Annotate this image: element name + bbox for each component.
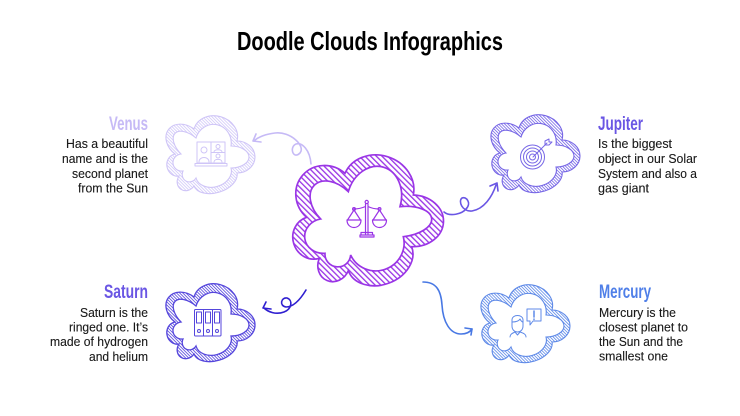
arrow: to Venus: [253, 133, 311, 164]
central cloud: [293, 155, 443, 286]
arrow: to Saturn: [263, 290, 306, 313]
text block: Saturn: [50, 282, 148, 364]
text block: Saturn: made of hydrogen: [50, 334, 148, 349]
text block: Mercury: the Sun and the: [599, 334, 683, 349]
title: Doodle Clouds Infographics: [237, 26, 503, 56]
text block: Jupiter: Is the biggest: [598, 136, 672, 151]
icon: binders: [194, 310, 221, 336]
cloud: Venus: [166, 116, 255, 194]
text block: Venus: Venus: [109, 114, 148, 135]
text block: Saturn: ringed one. It’s: [69, 320, 148, 334]
cloud: Jupiter: [491, 115, 580, 193]
text block: Saturn: and helium: [89, 349, 148, 364]
cloud: Mercury: [481, 285, 570, 363]
icon: scales: [347, 200, 386, 237]
text block: Venus: second planet: [72, 166, 148, 181]
text block: Venus: [62, 114, 148, 196]
icon: target: [520, 139, 552, 169]
text block: Mercury: Mercury: [599, 282, 651, 303]
text block: Mercury: smallest one: [599, 348, 668, 364]
text block: Mercury: Mercury is the: [599, 305, 676, 320]
icon: video call laptop: [195, 142, 227, 166]
arrow: to Mercury: [423, 282, 472, 335]
text block: Jupiter: System and also a: [598, 166, 698, 181]
text block: Venus: Has a beautiful: [66, 136, 148, 151]
arrow: to Jupiter: [444, 183, 498, 215]
text block: Venus: name and is the: [62, 151, 148, 166]
text block: Venus: from the Sun: [78, 180, 148, 196]
text block: Mercury: [599, 282, 688, 364]
icon: person with alert bubble: [510, 309, 541, 337]
text block: Jupiter: [598, 114, 698, 196]
text block: Saturn: Saturn: [104, 282, 148, 303]
text block: Jupiter: gas giant: [598, 180, 649, 196]
text block: Saturn: Saturn is the: [80, 305, 148, 320]
text block: Mercury: closest planet to: [599, 320, 688, 334]
cloud: Saturn: [166, 284, 255, 362]
text block: Jupiter: Jupiter: [598, 114, 643, 135]
text block: Jupiter: object in our Solar: [598, 151, 698, 166]
